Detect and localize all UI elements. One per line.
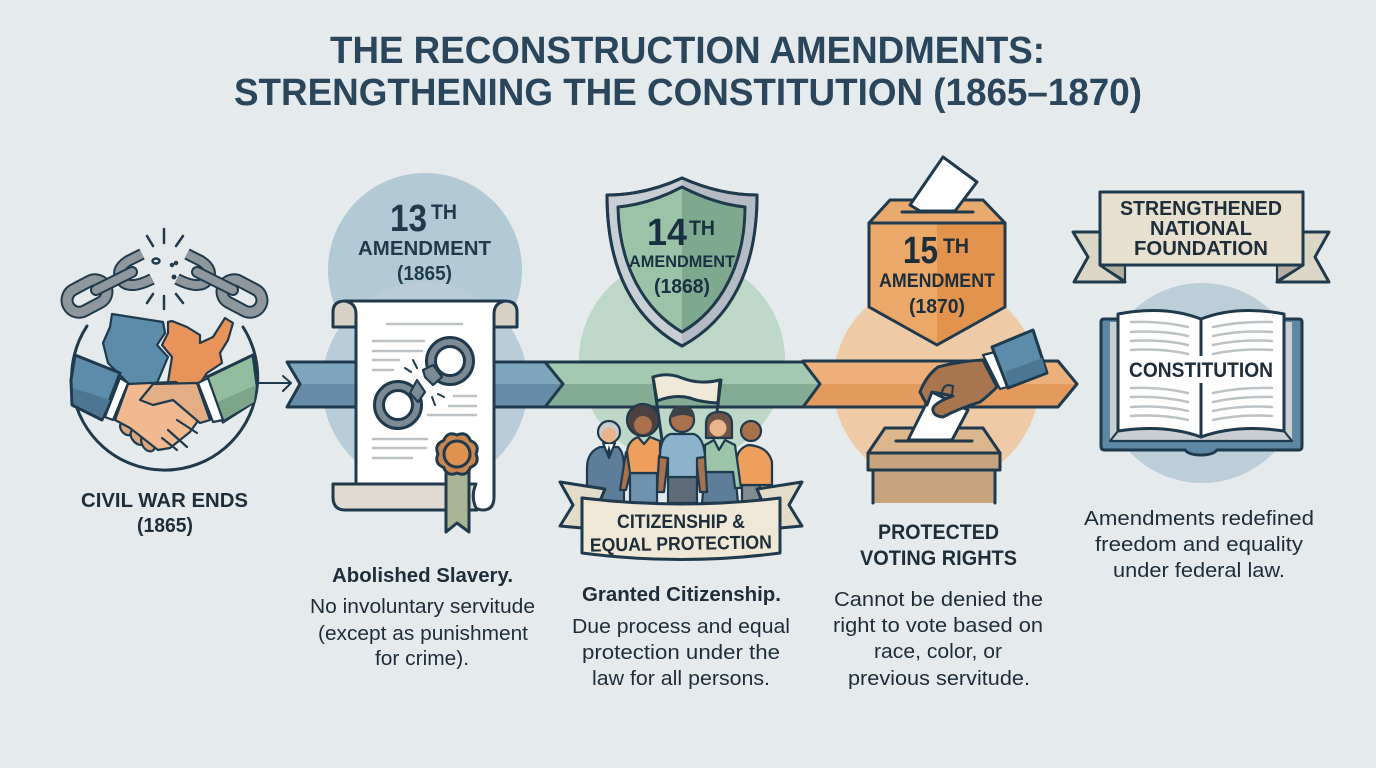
14th description: Due process and equal: [572, 616, 790, 638]
icon: hand casting vote: [908, 330, 1047, 440]
background circle: 13th amendment: [322, 173, 528, 488]
civil war label: [81, 490, 248, 537]
15th description: PROTECTED: [878, 521, 999, 544]
14th description: protection under the: [582, 642, 780, 664]
15th description: VOTING RIGHTS: [860, 547, 1017, 570]
map: orange half: [162, 318, 233, 388]
box lid: [869, 200, 1005, 223]
box text: 15: [903, 230, 938, 272]
box text: (1870): [909, 296, 965, 318]
title: THE RECONSTRUCTION AMENDMENTS:: [330, 30, 1045, 72]
timeline segment: orange: [803, 361, 1077, 407]
left chain: [63, 254, 152, 316]
thumb detail: [942, 385, 953, 394]
shield text: [629, 212, 736, 298]
page lines: [1131, 322, 1272, 420]
right sleeve: [198, 355, 257, 422]
background circle: 15th amendment: [833, 280, 1039, 486]
conclusion text: [1084, 508, 1314, 582]
13th description: [310, 565, 535, 670]
shield text: (1868): [654, 276, 710, 298]
timeline segment: blue: [287, 362, 563, 407]
conclusion text: freedom and equality: [1095, 534, 1303, 556]
map: blue half: [103, 314, 168, 388]
flag: [653, 375, 721, 440]
title: [234, 30, 1142, 114]
box face: [869, 223, 1005, 345]
scroll bottom roll: [333, 484, 477, 510]
background circle: constitution: [1102, 283, 1302, 483]
conclusion text: Amendments redefined: [1084, 508, 1314, 530]
13th description: No involuntary servitude: [310, 596, 535, 618]
title: STRENGTHENING THE CONSTITUTION (1865–1870): [234, 72, 1142, 114]
14th description: law for all persons.: [592, 668, 770, 690]
sparks: [147, 229, 183, 309]
circle outline: [72, 326, 258, 470]
ballot: [908, 392, 968, 440]
sleeve: [992, 330, 1047, 388]
shield text: AMENDMENT: [629, 252, 736, 271]
person: woman: [702, 412, 741, 503]
shield text: 14: [647, 212, 687, 254]
hand: [920, 360, 997, 417]
strengthened national foundation banner: [1073, 192, 1329, 282]
background circle: 14th amendment: [579, 257, 785, 463]
13th amendment heading: AMENDMENT: [358, 238, 491, 260]
shield text: TH: [689, 217, 715, 240]
15th description: race, color, or: [874, 641, 1002, 663]
strengthened national foundation banner: STRENGTHENED: [1120, 198, 1282, 220]
conclusion text: under federal law.: [1113, 560, 1285, 582]
citizenship banner: EQUAL PROTECTION: [590, 532, 772, 557]
box text: [879, 230, 995, 318]
box text: AMENDMENT: [879, 271, 995, 292]
person: suit: [587, 421, 624, 503]
strengthened national foundation banner: NATIONAL: [1150, 218, 1252, 240]
book cover: [1101, 319, 1302, 455]
14th description: [572, 584, 790, 690]
13th amendment heading: 13: [390, 198, 427, 240]
13th description: for crime).: [375, 648, 469, 670]
wax seal: [437, 434, 477, 474]
15th description: [833, 521, 1043, 690]
handshake: [115, 382, 210, 454]
civil war label: CIVIL WAR ENDS: [81, 490, 248, 512]
scroll paper: [345, 301, 505, 510]
scroll top knobs: [333, 301, 517, 327]
13th amendment heading: [358, 198, 491, 285]
small arrow to timeline: [257, 376, 291, 391]
book pages: [1118, 310, 1284, 437]
14th description: Granted Citizenship.: [582, 584, 781, 606]
icon: broken chain: [63, 229, 266, 316]
13th amendment heading: TH: [431, 201, 457, 224]
book label: CONSTITUTION: [1129, 359, 1273, 382]
box text: TH: [943, 235, 969, 258]
timeline arrow: [287, 361, 1077, 407]
strengthened national foundation banner: FOUNDATION: [1134, 238, 1268, 260]
ballot paper: [910, 157, 977, 211]
cuff: [983, 352, 1007, 389]
timeline segment: green: [545, 362, 820, 407]
broken handcuffs: [374, 338, 474, 428]
icon: open constitution book: [1101, 310, 1302, 455]
person: orange shirt right: [737, 421, 772, 503]
group of people with flag: [560, 375, 802, 560]
icon: shield 14th amendment: [607, 178, 757, 346]
15th description: Cannot be denied the: [834, 589, 1043, 611]
right chain: [177, 254, 266, 316]
icon: handshake over divided map: [71, 314, 258, 470]
citizenship banner: [560, 482, 802, 560]
person: afro hair: [620, 404, 660, 503]
13th amendment heading: (1865): [397, 263, 452, 285]
13th description: Abolished Slavery.: [332, 565, 513, 587]
15th description: right to vote based on: [833, 615, 1043, 637]
civil war label: (1865): [137, 515, 193, 537]
person: centre blue shirt: [657, 406, 707, 503]
slot: [902, 210, 973, 214]
left sleeve: [71, 355, 128, 420]
citizenship banner: CITIZENSHIP &: [617, 512, 745, 533]
icon: ballot box 15th amendment: [869, 157, 1005, 345]
icon: scroll document: [333, 301, 517, 532]
document lines: [373, 324, 476, 458]
ribbon: [446, 470, 469, 532]
icon: lower ballot box: [868, 428, 1000, 503]
13th description: (except as punishment: [318, 623, 528, 645]
15th description: previous servitude.: [848, 668, 1030, 690]
